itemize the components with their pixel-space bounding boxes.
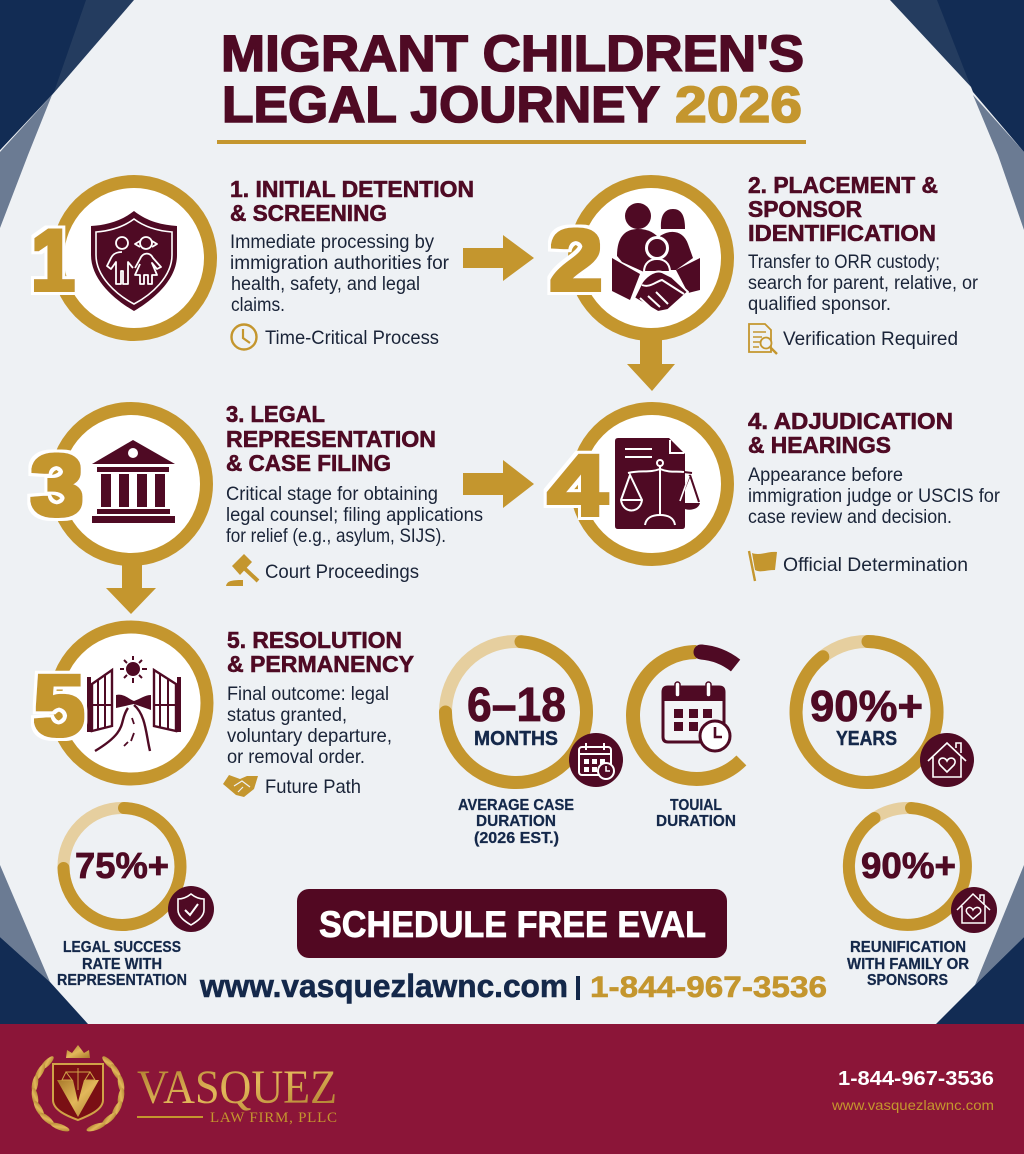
step 1 text [230, 176, 474, 316]
stat: 90% reunification ring [849, 808, 997, 933]
call to action button: SCHEDULE FREE EVAL [319, 904, 706, 945]
logo V monogram [57, 1080, 99, 1117]
stat label: total duration: TOUIAL [670, 797, 722, 814]
logo laurel wreath [30, 1055, 126, 1133]
stat: average case duration ring: MONTHS [474, 728, 558, 750]
step 2 text: IDENTIFICATION [748, 220, 936, 246]
icon: shield check badge [168, 886, 214, 932]
stat: 90% years ring: 90%+ [810, 682, 923, 731]
step 5 badge [55, 627, 207, 779]
tag: court proceedings [226, 554, 419, 586]
title: MIGRANT CHILDREN'S [221, 25, 804, 82]
step 4 numeral: 4 [547, 438, 608, 534]
step 2 badge [574, 182, 728, 334]
step 2 text [748, 172, 979, 315]
corner decoration: top left [0, 0, 134, 228]
title [221, 25, 804, 133]
stat label: average case duration [458, 797, 574, 847]
stat label: legal success rate: RATE WITH [82, 956, 162, 973]
step 4 text: Appearance before [748, 465, 903, 486]
title: LEGAL JOURNEY [222, 76, 660, 133]
stat label: total duration [656, 797, 736, 830]
step 2 text: qualified sponsor. [748, 294, 891, 315]
step 3 text: Critical stage for obtaining [226, 484, 438, 505]
stat label: reunification [847, 939, 969, 989]
step 2 text: 2. PLACEMENT & [748, 172, 938, 198]
stat label: reunification: REUNIFICATION [850, 939, 966, 956]
step 5 text: Final outcome: legal [227, 684, 389, 705]
call to action button [297, 889, 727, 958]
step 1 text: 1. INITIAL DETENTION [230, 176, 474, 202]
stat: 75% legal success ring: 75%+ [75, 845, 169, 886]
stat label: legal success rate: REPRESENTATION [57, 972, 187, 989]
step 5 text: & PERMANENCY [227, 651, 414, 677]
stat label: reunification: WITH FAMILY OR [847, 956, 969, 973]
logo shield [53, 1064, 103, 1120]
title: 2026 [675, 76, 802, 133]
stat label: average case duration: (2026 EST.) [474, 830, 559, 847]
step 4 text: 4. ADJUDICATION [748, 408, 953, 434]
logo: firm name: LAW FIRM, PLLC [210, 1110, 337, 1126]
tag: time-critical process: Time-Critical Process [265, 327, 439, 349]
step 3 numeral: 3 [30, 438, 84, 534]
step 4 text: case review and decision. [748, 507, 952, 528]
stat label: legal success rate: LEGAL SUCCESS [63, 939, 181, 956]
right pan of scales [678, 472, 700, 510]
step 2 numeral: 2 [549, 213, 603, 309]
stat label: average case duration: AVERAGE CASE [458, 797, 574, 814]
corner decoration: top right [890, 0, 1024, 230]
stat: 90% years ring [796, 642, 974, 787]
corner decoration: bottom left [0, 865, 88, 1024]
icon: courthouse [92, 440, 175, 523]
step 4 text [748, 408, 1001, 528]
step 2 text: search for parent, relative, or [748, 273, 979, 294]
step 3 badge [56, 408, 206, 560]
step 2 text: Transfer to ORR custody; [748, 252, 940, 273]
step 3 text [226, 401, 483, 547]
step 5 text: or removal order. [227, 747, 365, 768]
step 3 text: legal counsel; filing applications [226, 505, 483, 526]
step 5 text: status granted, [227, 705, 347, 726]
step 3 text: for relief (e.g., asylum, SIJS). [226, 526, 446, 547]
step 2 text: SPONSOR [748, 196, 862, 222]
stat label: reunification: SPONSORS [867, 972, 948, 989]
step 3 text: 3. LEGAL [226, 401, 325, 427]
tag: verification required: Verification Required [783, 328, 958, 350]
step 1 text: Immediate processing by [230, 232, 434, 253]
step 3 text: REPRESENTATION [226, 426, 436, 452]
stat: average case duration ring: 6–18 [467, 679, 566, 732]
step 4 text: immigration judge or USCIS for [748, 486, 1001, 507]
logo: crest [30, 1045, 126, 1133]
step 1 text: & SCREENING [230, 200, 387, 226]
step 1 text: immigration authorities for [230, 253, 450, 274]
contact line [199, 968, 827, 1004]
tag: official determination: Official Determination [783, 554, 968, 576]
step 1 text: health, safety, and legal [231, 274, 420, 295]
corner decoration: bottom right [936, 865, 1024, 1024]
arrow: step 2 to 4 [627, 338, 675, 391]
tag: official determination [749, 551, 968, 581]
step 5 text: 5. RESOLUTION [227, 627, 402, 653]
step 5 text [227, 627, 414, 768]
step 4 badge [576, 408, 728, 560]
step 4 text: & HEARINGS [748, 432, 891, 458]
stat label: legal success rate [57, 939, 187, 989]
step 1 numeral: 1 [31, 213, 75, 309]
arrow: step 3 to 5 [106, 563, 156, 614]
footer phone: 1-844-967-3536 [838, 1068, 994, 1090]
contact line: 1-844-967-3536 [590, 971, 827, 1004]
icon: shield with children [91, 211, 177, 311]
contact line: www.vasquezlawnc.com [199, 968, 568, 1004]
stat: average case duration ring [446, 642, 623, 787]
stat: 90% reunification ring: 90%+ [861, 845, 956, 886]
icon: calendar with clock [663, 682, 730, 751]
step 5 text: voluntary departure, [227, 726, 392, 747]
icon: family with handshake [612, 203, 700, 312]
footer website: www.vasquezlawnc.com [831, 1097, 994, 1113]
step 1 text: claims. [231, 295, 285, 316]
icon: house with heart badge [920, 733, 974, 787]
arrow: step 3 to 4 [463, 460, 534, 508]
arrow: step 1 to 2 [463, 235, 534, 281]
logo: firm name: VASQUEZ [137, 1061, 337, 1114]
tag: court proceedings: Court Proceedings [265, 561, 419, 583]
footer band [0, 1024, 1024, 1154]
stat: 75% legal success ring [64, 808, 214, 932]
step 1 badge [58, 182, 210, 334]
tag: future path [223, 775, 361, 798]
stat: total duration ring [633, 644, 741, 779]
step 5 numeral: 5 [33, 658, 85, 754]
icon: document with scales [615, 438, 700, 529]
icon: calendar badge [569, 733, 623, 787]
step 3 text: & CASE FILING [226, 450, 391, 476]
stat: 90% years ring: YEARS [836, 728, 897, 750]
logo crown [66, 1045, 90, 1058]
icon: open gates with road and sun [89, 656, 179, 751]
tag: future path: Future Path [265, 776, 361, 798]
stat label: average case duration: DURATION [476, 813, 556, 830]
tag: verification required [749, 324, 958, 354]
icon: house with heart badge small [951, 887, 997, 933]
stat label: total duration: DURATION [656, 813, 736, 830]
